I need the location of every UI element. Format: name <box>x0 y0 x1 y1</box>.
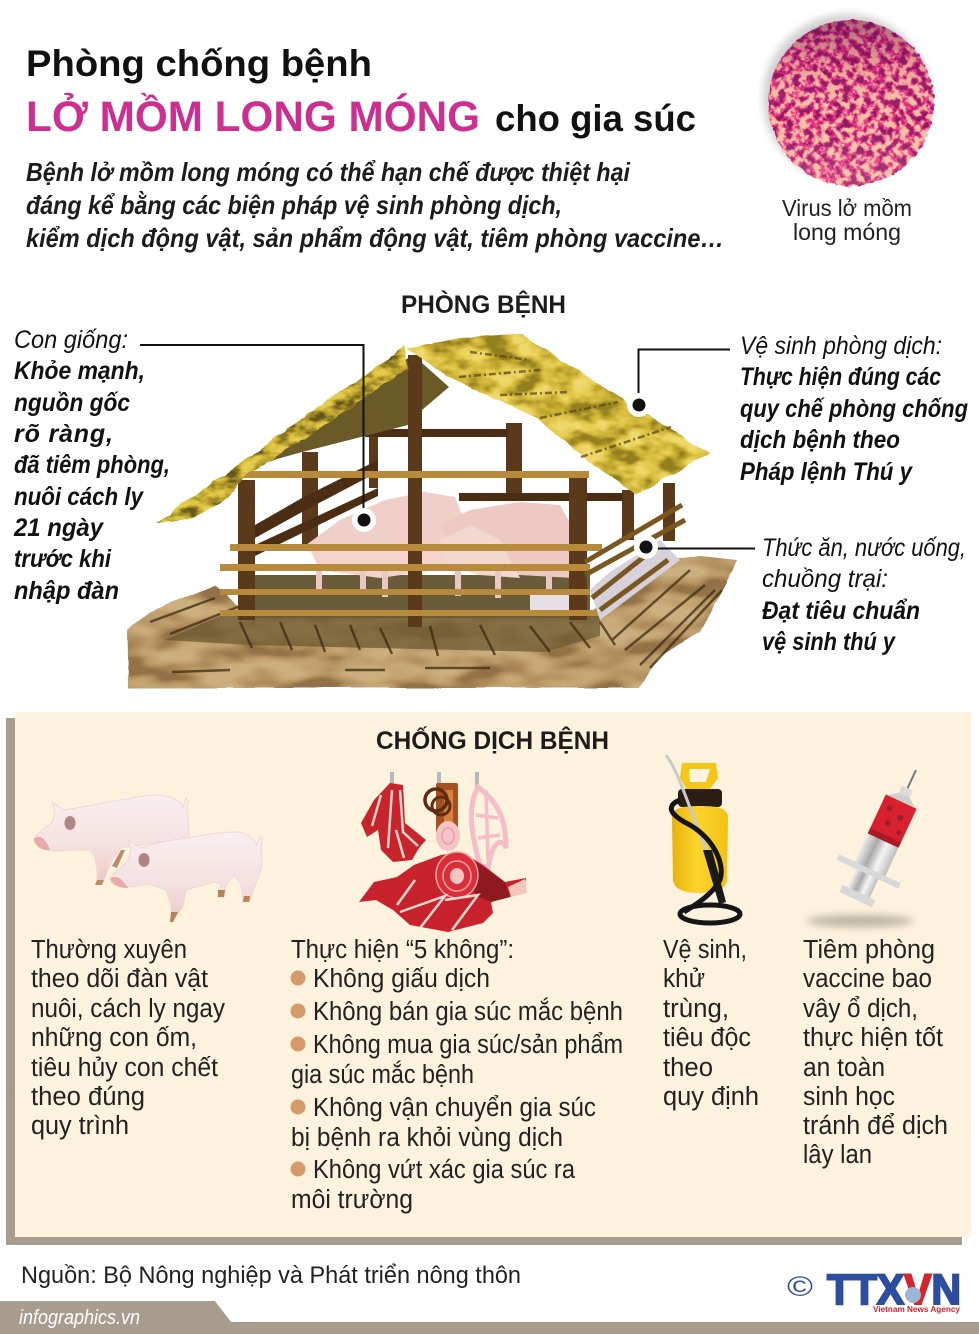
title: cho gia súc <box>495 98 696 139</box>
column: vệ sinh: theo <box>663 1054 713 1082</box>
callout: con giống: Con giống: <box>14 326 128 354</box>
column: tiêm phòng: sinh học <box>803 1083 895 1111</box>
column: tiêm phòng: lây lan <box>803 1141 872 1169</box>
virus caption <box>782 195 912 245</box>
column: theo dõi đàn vật: những con ốm, <box>31 1024 197 1052</box>
column: tiêm phòng: vaccine bao <box>803 965 932 993</box>
callout: con giống: Khỏe mạnh, <box>14 357 145 385</box>
column: vệ sinh: Vệ sinh, <box>663 936 747 964</box>
icon: sprayer <box>666 755 740 923</box>
column: vệ sinh <box>663 936 759 1111</box>
heading: phòng bệnh: PHÒNG BỆNH <box>401 289 566 319</box>
intro text: kiểm dịch động vật, sản phẩm động vật, tiêm phòng vaccine… <box>26 223 724 253</box>
column: tiêm phòng: an toàn <box>803 1054 885 1082</box>
column: theo dõi đàn vật: theo dõi đàn vật <box>31 965 208 993</box>
column: 5 không: Thực hiện “5 không”: <box>291 936 514 964</box>
callout: vệ sinh phòng dịch: Pháp lệnh Thú y <box>740 458 913 486</box>
column: theo dõi đàn vật: theo đúng <box>31 1083 145 1111</box>
callout: con giống: đã tiêm phòng, <box>14 451 170 479</box>
callout: vệ sinh phòng dịch: Thực hiện đúng các <box>740 363 941 391</box>
column: 5 không: Không mua gia súc/sản phẩm <box>313 1031 623 1059</box>
illustration: pig barn <box>127 334 737 688</box>
callout: con giống: nuôi cách ly <box>14 483 144 511</box>
logo: ttxvn: TTXVN <box>827 1266 961 1314</box>
icon: two pigs <box>34 795 262 922</box>
title <box>26 43 696 141</box>
intro text <box>26 157 724 253</box>
leader line: vệ sinh <box>627 350 730 417</box>
callout: thức ăn, nước uống: vệ sinh thú y <box>762 628 896 656</box>
logo: ttxvn: Vietnam News Agency <box>873 1304 960 1314</box>
title: LỞ MỒM LONG MÓNG <box>26 92 480 141</box>
callout: thức ăn, nước uống: Đạt tiêu chuẩn <box>762 597 920 625</box>
column: 5 không <box>290 936 623 1214</box>
column: theo dõi đàn vật: Thường xuyên <box>31 936 187 964</box>
source: Nguồn: Bộ Nông nghiệp và Phát triển nông thôn <box>21 1262 521 1289</box>
callout: con giống: rõ ràng, <box>14 420 113 448</box>
callout: vệ sinh phòng dịch: Vệ sinh phòng dịch: <box>740 332 942 360</box>
virus caption: long móng <box>793 219 901 245</box>
callout: thức ăn, nước uống <box>762 534 966 656</box>
column: tiêm phòng: tránh để dịch <box>803 1112 948 1140</box>
column: 5 không: môi trường <box>291 1186 413 1214</box>
column: vệ sinh: trùng, <box>663 995 729 1023</box>
footer band: infographics.vn <box>19 1307 140 1329</box>
callout: thức ăn, nước uống: chuồng trại: <box>762 565 888 593</box>
heading: chống dịch bệnh: CHỐNG DỊCH BỆNH <box>376 725 609 755</box>
column: tiêm phòng <box>803 936 948 1169</box>
logo: ttxvn: © <box>787 1271 813 1302</box>
column: 5 không: Không vận chuyển gia súc <box>313 1094 596 1122</box>
column: 5 không: Không vứt xác gia súc ra <box>313 1156 576 1184</box>
column: 5 không: Không giấu dịch <box>313 965 490 993</box>
column: theo dõi đàn vật <box>31 936 225 1140</box>
icon: syringe <box>806 756 947 927</box>
column: theo dõi đàn vật: tiêu hủy con chết <box>31 1054 218 1082</box>
footer band <box>0 1301 979 1334</box>
column: theo dõi đàn vật: nuôi, cách ly ngay <box>31 995 225 1023</box>
column: 5 không: gia súc mắc bệnh <box>291 1060 474 1089</box>
callout: vệ sinh phòng dịch: dịch bệnh theo <box>740 426 900 454</box>
title: Phòng chống bệnh <box>26 43 372 84</box>
column: 5 không: Không bán gia súc mắc bệnh <box>313 997 623 1026</box>
callout: con giống: nguồn gốc <box>14 389 130 417</box>
column: 5 không: bị bệnh ra khỏi vùng dịch <box>291 1124 563 1152</box>
column: theo dõi đàn vật: quy trình <box>31 1112 129 1140</box>
callout: con giống: trước khi <box>14 545 112 573</box>
callout: con giống: 21 ngày <box>13 514 104 542</box>
leader line: thức ăn <box>634 535 755 559</box>
column: tiêm phòng: vây ổ dịch, <box>803 995 918 1023</box>
column: tiêm phòng: Tiêm phòng <box>803 936 935 964</box>
icon: virus <box>763 14 934 186</box>
column: tiêm phòng: thực hiện tốt <box>803 1024 943 1052</box>
icon: meat <box>359 772 527 932</box>
column: vệ sinh: quy định <box>663 1083 759 1111</box>
callout: vệ sinh phòng dịch <box>740 332 968 486</box>
virus caption: Virus lở mồm <box>782 195 912 221</box>
callout: con giống: nhập đàn <box>14 577 119 605</box>
column: vệ sinh: khử <box>663 965 705 993</box>
column: vệ sinh: tiêu độc <box>663 1024 751 1052</box>
intro text: Bệnh lở mồm long móng có thể hạn chế được thiệt hại <box>26 157 631 187</box>
intro text: đáng kể bằng các biện pháp vệ sinh phòng dịch, <box>26 190 562 220</box>
callout: con giống <box>13 326 170 605</box>
panel: chống dịch bệnh <box>6 712 971 1245</box>
leader line: con giống <box>140 345 376 532</box>
